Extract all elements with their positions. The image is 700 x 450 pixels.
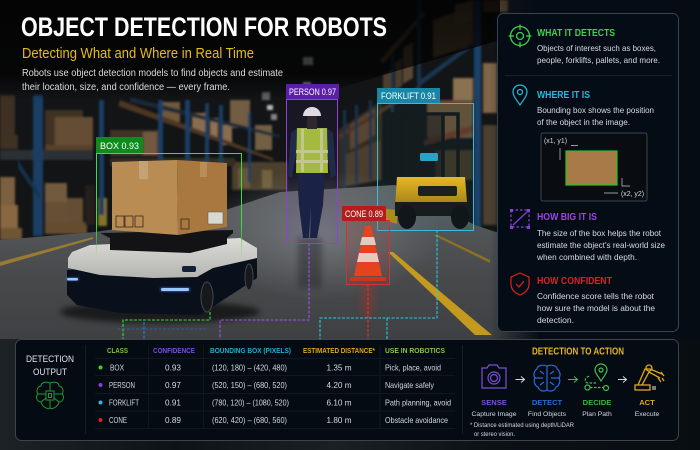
legs [297,172,325,238]
robot white shell [68,238,257,278]
step: act [635,398,659,418]
subtitle: Detecting What and Where in Real Time [22,45,254,62]
forklift [378,114,469,229]
what it detects: people, forklifts, pallets, and more. [537,55,660,65]
table row: forklift: (780, 120) – (1080, 520) [212,398,289,408]
step: decide: Plan Path [582,411,612,418]
icon: target [508,24,532,48]
table row: person [98,381,435,390]
how big it is: The size of the box helps the robot [537,228,662,238]
icon: path and pin [585,364,608,390]
table row: cone [98,416,448,425]
table: header: CONFIDENCE [153,346,195,355]
icon: brain [534,365,560,391]
step: decide [582,398,612,418]
step: act: Execute [635,411,659,418]
table row: forklift: 0.91 [165,398,181,408]
robot wheels [201,264,253,312]
table: header [107,346,445,355]
what it detects: Objects of interest such as boxes, [537,43,656,53]
intro text: Robots use object detection models to find objects and estimate [22,68,283,79]
person [288,107,336,288]
where it is: Bounding box shows the position [537,105,654,115]
detection box: FORKLIFT [377,88,474,230]
where it is: WHERE IT IS [537,89,590,101]
how confident: HOW CONFIDENT [537,275,612,287]
how confident [537,275,655,325]
arms and jacket [288,128,336,178]
how big it is: estimate the object’s real-world size [537,240,665,250]
what it detects [537,27,660,65]
table row: cone: (620, 420) – (680, 560) [212,416,287,425]
detection to action heading: DETECTION TO ACTION [532,346,624,358]
table row: cone: 0.89 [165,416,181,425]
arrow [618,376,626,382]
table row: box: Pick, place, avoid [385,364,441,372]
how confident: how sure the model is about the [537,303,655,313]
title: OBJECT DETECTION FOR ROBOTS [21,12,387,42]
robot carrying box [60,160,260,323]
detection output heading: DETECTION [26,354,74,365]
detection box: CONE: CONE 0.89 [345,209,383,219]
table row: cone: Obstacle avoidance [385,416,448,425]
icon: shield [511,273,529,295]
footnote: or stereo vision. [474,431,515,438]
table row: person: PERSON [109,381,135,390]
step: sense: SENSE [481,398,507,407]
how big it is: HOW BIG IT IS [537,211,597,223]
how big it is: when combined with depth. [536,252,637,262]
detection box: PERSON [286,84,339,244]
table row: box: BOX [110,364,124,372]
icon: robot arm [635,365,664,390]
traffic cone [350,226,386,320]
detection box: CONE [342,206,390,284]
detection output heading: OUTPUT [33,367,67,378]
table row: box: 1.35 m [326,364,352,372]
icon: location pin [513,85,527,105]
safety vest [296,128,328,173]
icon: size box [510,209,530,229]
table row: person: (520, 150) – (680, 520) [212,381,287,390]
step: decide: DECIDE [583,398,611,407]
table row: cone: CONE [109,416,127,425]
table row: forklift: 6.10 m [326,398,352,408]
cardboard box [112,160,227,235]
step: detect: Find Objects [528,411,567,418]
icon: camera [482,365,506,388]
detection output heading [26,354,74,378]
table row: box: 0.93 [165,364,181,372]
detection box: BOX [96,137,242,258]
intro text [22,68,283,93]
table row: box [98,364,441,372]
detection box: PERSON: PERSON 0.97 [289,87,336,97]
table row: person: Navigate safely [385,381,435,390]
table: header: ESTIMATED DISTANCE* [303,346,375,355]
step: sense: Capture Image [472,411,517,418]
head and helmet [307,115,317,129]
how confident: detection. [537,315,574,325]
panel: right info [498,14,678,332]
table row: forklift [98,398,451,408]
step: act: ACT [639,398,655,407]
icon: brain chip [37,382,63,409]
table row: cone: 1.80 m [326,416,352,425]
table row: forklift: Path planning, avoid [385,398,451,408]
footnote: * Distance estimated using depth/LiDAR [470,422,574,429]
table row: person: 0.97 [165,381,181,390]
table: header: CLASS [107,346,128,355]
table row: person: 4.20 m [326,381,352,390]
step: detect: DETECT [532,398,563,407]
where it is: of the object in the image. [537,117,630,127]
bounding box diagram: (x2, y2) [621,191,644,198]
arrow [516,376,524,382]
what it detects: WHAT IT DETECTS [537,27,615,39]
robot base [67,256,257,315]
detection box: BOX: BOX 0.93 [100,141,139,151]
bounding box diagram: (x1, y1) [544,138,567,145]
how big it is [536,211,665,262]
detection box: FORKLIFT: FORKLIFT 0.91 [381,91,436,101]
arrow [568,376,578,382]
table: header: BOUNDING BOX (PIXELS) [210,346,291,355]
table row: forklift: FORKLIFT [109,398,139,408]
intro text: their location, size, and confidence — every frame. [22,82,230,93]
robot blue lights [66,266,196,292]
step: detect [528,398,567,418]
bounding box diagram [541,133,647,201]
table: header: USE IN ROBOTICS [385,346,445,355]
panel: bottom output [16,340,678,440]
how confident: Confidence score tells the robot [537,291,655,301]
footnote [470,422,574,438]
pallet [100,230,233,253]
step: sense [472,398,517,418]
dashed connectors [118,230,437,339]
table row: box: (120, 180) – (420, 480) [212,364,287,372]
where it is [537,89,654,127]
